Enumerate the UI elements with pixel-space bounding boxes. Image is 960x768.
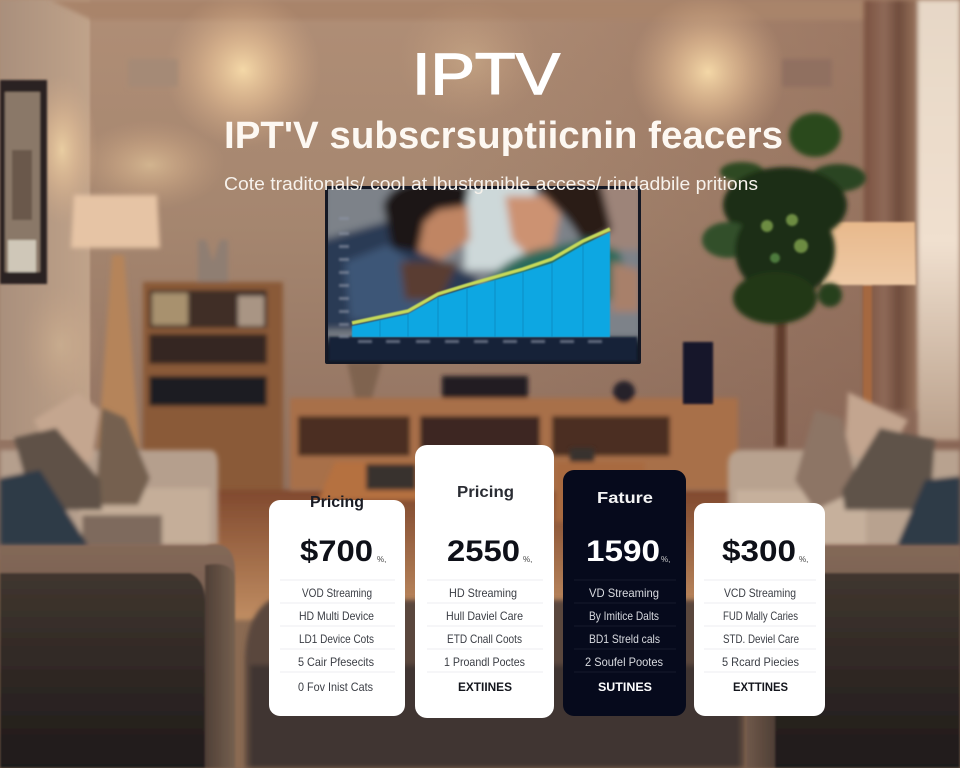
feature row 5: EXTIINES <box>458 680 512 694</box>
feature row 5: EXTTINES <box>733 680 788 694</box>
coffee table <box>318 448 645 522</box>
feature row 2: HD Multi Device <box>299 609 374 623</box>
bookshelf <box>143 240 283 497</box>
price unit: %, <box>799 555 808 564</box>
media console <box>290 362 738 490</box>
yellow trend line <box>352 229 610 323</box>
feature row 4: 5 Rcard Piecies <box>722 655 799 669</box>
feature row 1: VOD Streaming <box>302 586 372 600</box>
floor <box>210 490 750 620</box>
plant foliage <box>702 113 866 324</box>
foreground center sofa <box>245 600 745 768</box>
ceiling <box>50 0 960 20</box>
feature row 1: VCD Streaming <box>724 586 796 600</box>
feature row 4: 1 Proandl Poctes <box>444 655 525 669</box>
TV frame <box>325 186 641 364</box>
card heading: Fature <box>597 490 653 507</box>
feature row 3: LD1 Device Cots <box>299 632 374 646</box>
TV picture of couple <box>322 180 644 340</box>
chart column separators <box>380 245 583 337</box>
price unit: %, <box>661 555 670 564</box>
price: 1590 <box>586 535 660 568</box>
dividers <box>574 580 676 672</box>
pricing card 1 <box>269 494 405 716</box>
card heading: Pricing <box>310 494 364 511</box>
price: $300 <box>722 535 796 568</box>
dividers <box>427 580 543 672</box>
dividers <box>704 580 816 672</box>
feature row 3: BD1 Streld cals <box>589 632 660 646</box>
wall shading on the right <box>0 0 960 560</box>
feature row 2: By Imitice Dalts <box>589 609 659 623</box>
potted plant <box>702 113 866 447</box>
left beige sofa <box>0 393 218 545</box>
foreground left sofa arm <box>0 544 235 768</box>
left floor lamp <box>71 195 160 450</box>
feature row 2: Hull Daviel Care <box>446 609 523 623</box>
feature row 4: 5 Cair Pfesecits <box>298 655 374 669</box>
right curtains and window <box>864 0 960 440</box>
price: 2550 <box>447 535 520 568</box>
TV bottom dark band <box>329 337 637 361</box>
right floor lamp <box>821 222 916 405</box>
ceiling spotlight glows <box>20 0 786 405</box>
plant trunk <box>775 320 786 447</box>
speaker <box>683 342 713 404</box>
subtitle: IPT'V subscrsuptiicnin feacers <box>224 115 783 157</box>
feature row 1: VD Streaming <box>589 586 659 600</box>
feature row 3: ETD Cnall Coots <box>447 632 522 646</box>
card background <box>415 445 554 718</box>
price unit: %, <box>523 555 532 564</box>
feature row 5: 0 Fov Inist Cats <box>298 680 373 694</box>
dividers <box>280 580 395 672</box>
framed picture <box>0 80 47 284</box>
card background <box>694 503 825 716</box>
feature row 3: STD. Deviel Care <box>723 632 799 646</box>
left side wall <box>0 0 90 440</box>
feature row 2: FUD Mally Caries <box>723 609 798 623</box>
feature row 4: 2 Soufel Pootes <box>585 655 663 669</box>
tagline: Cote traditonals/ cool at lbustgmible access/ rindadbile pritions <box>224 174 758 194</box>
chart axis labels <box>339 217 602 343</box>
sunlit leaves <box>761 214 808 263</box>
card background <box>269 500 405 716</box>
card background <box>563 470 686 716</box>
title: IPTV <box>412 42 560 107</box>
card heading: Pricing <box>457 484 514 501</box>
feature row 5: SUTINES <box>598 680 652 694</box>
feature row 1: HD Streaming <box>449 586 517 600</box>
pricing card 4 <box>694 503 825 716</box>
back wall <box>0 0 960 560</box>
pricing card 3 (dark highlighted) <box>563 470 686 716</box>
foreground right sofa arm <box>746 546 960 768</box>
blue area chart <box>352 232 610 337</box>
right beige sofa <box>728 392 960 545</box>
pricing card 2 <box>415 445 554 718</box>
wall vents <box>128 59 832 87</box>
price unit: %, <box>377 555 386 564</box>
television screen <box>322 180 644 364</box>
price: $700 <box>300 535 373 568</box>
